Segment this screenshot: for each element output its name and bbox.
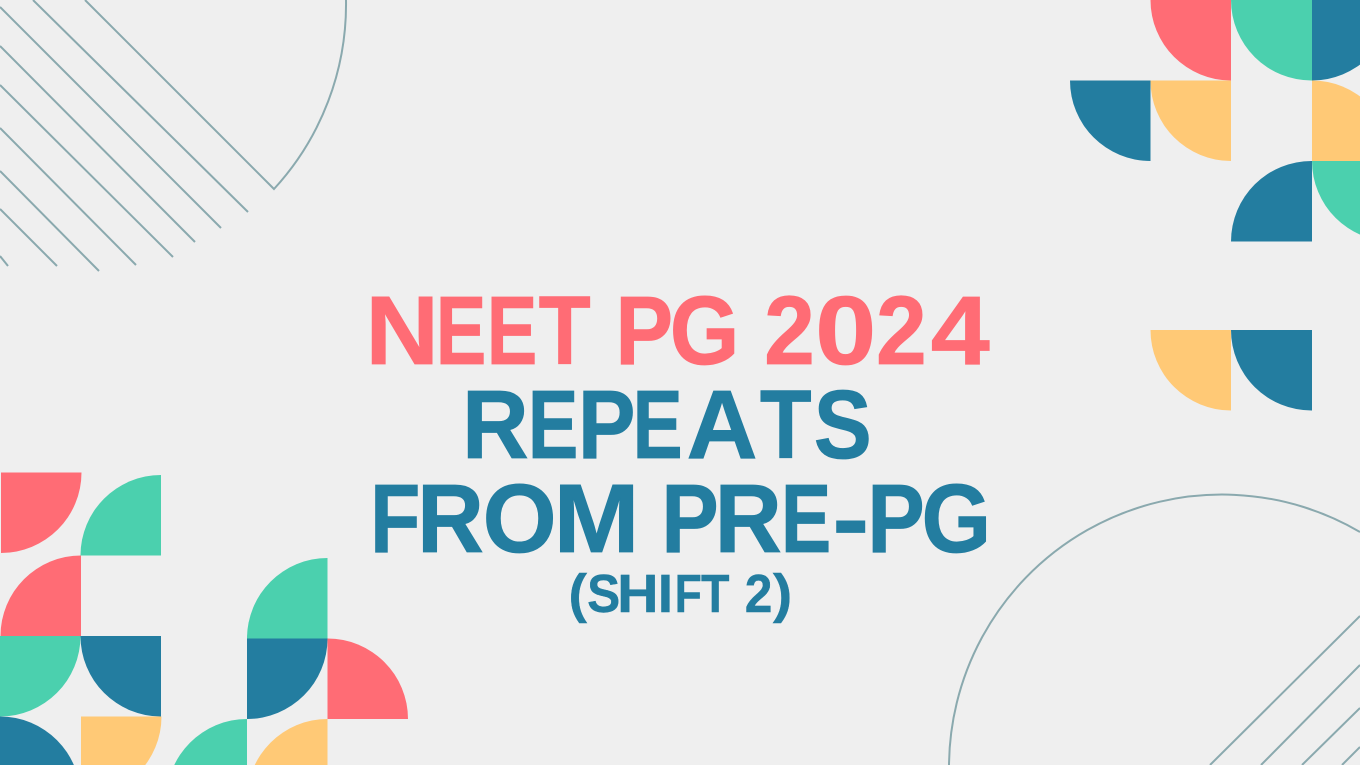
title: NEET PG 2024: E <box>487 276 537 385</box>
title: FROM PRE-PG: - <box>832 464 869 573</box>
title: NEET PG 2024: 2 <box>876 276 927 385</box>
title: NEET PG 2024: T <box>539 276 591 385</box>
title: NEET PG 2024: 4 <box>931 276 990 385</box>
title: REPEATS: R <box>462 370 529 479</box>
title: FROM PRE-PG: P <box>867 464 925 573</box>
subtitle: (SHIFT 2): H <box>617 564 659 624</box>
title: FROM PRE-PG: O <box>483 464 557 573</box>
title: FROM PRE-PG: F <box>370 464 420 573</box>
title: FROM PRE-PG: E <box>781 464 831 573</box>
title: NEET PG 2024: N <box>365 276 439 385</box>
subtitle: (SHIFT 2): F <box>675 564 702 624</box>
title: FROM PRE-PG: G <box>922 464 991 573</box>
title: NEET PG 2024: E <box>436 276 486 385</box>
title: REPEATS: E <box>633 370 683 479</box>
title: FROM PRE-PG: R <box>417 464 484 573</box>
subtitle: (SHIFT 2): S <box>587 564 620 624</box>
title: REPEATS: T <box>760 370 812 479</box>
title: NEET PG 2024: 2 <box>764 276 815 385</box>
subtitle: (SHIFT 2): I <box>658 564 673 624</box>
title: REPEATS: P <box>578 370 636 479</box>
subtitle: (SHIFT 2): ) <box>773 564 792 624</box>
line art: top-left arc with diagonal stripes <box>0 0 346 271</box>
title: FROM PRE-PG: M <box>554 464 640 573</box>
title: REPEATS: S <box>814 370 872 479</box>
subtitle: (SHIFT 2): ( <box>568 564 587 624</box>
title: NEET PG 2024: G <box>670 276 739 385</box>
decoration: top-right quarter-circle cluster <box>1070 0 1360 242</box>
decoration: middle-right quarter-circle pair <box>1150 330 1312 411</box>
title: NEET PG 2024: P <box>615 276 673 385</box>
subtitle: (SHIFT 2): T <box>701 564 730 624</box>
subtitle: (SHIFT 2): 2 <box>745 564 772 624</box>
decoration: bottom-left quarter-circle cluster <box>0 472 408 765</box>
title: REPEATS: E <box>528 370 578 479</box>
line art: bottom-right arc with diagonal stripes <box>949 495 1360 765</box>
title: FROM PRE-PG: P <box>661 464 719 573</box>
title: REPEATS: A <box>686 370 758 479</box>
title: NEET PG 2024: 0 <box>815 276 876 385</box>
title: FROM PRE-PG: R <box>715 464 782 573</box>
